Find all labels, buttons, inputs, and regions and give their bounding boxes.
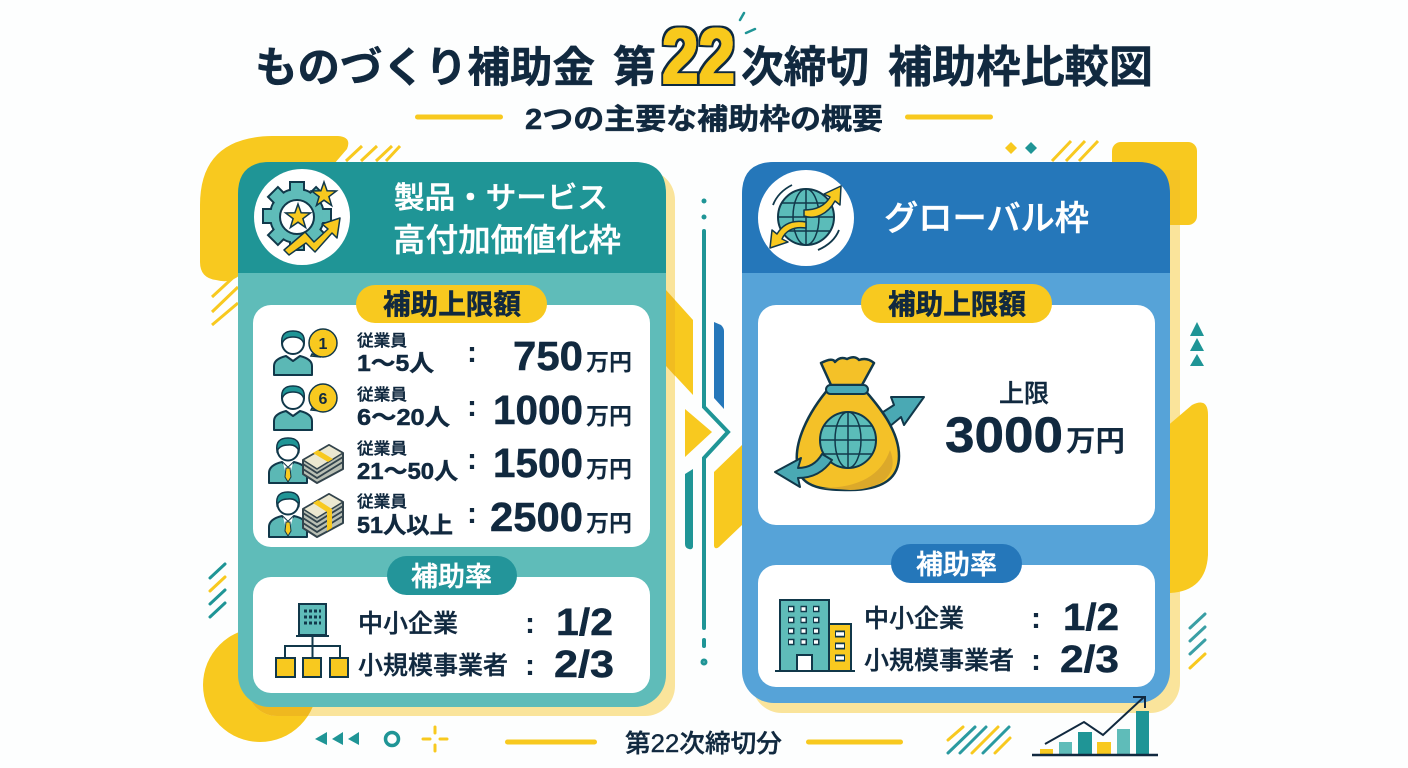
subsidy rate table: 2/3 [554,644,614,686]
row: 1-5 employees: 従業員 [357,332,407,350]
heading: グローバル枠 [884,200,1089,238]
row: 21-50 employees [269,438,632,486]
row: 1-5 employees: 1〜5人 [357,350,434,376]
subsidy rate table: 中小企業 [864,605,964,633]
subsidy rate table: 小規模事業者 [358,652,508,680]
subtitle: 2つの主要な補助枠の概要 [525,103,883,136]
row: 6-20 employees: 6〜20人 [357,404,450,430]
icon: money bag [775,357,924,490]
subsidy limit table: 補助上限額 [383,289,521,320]
subsidy rate table [253,556,650,693]
title: 第 [613,44,656,92]
title [255,12,1153,100]
subsidy rate table: : [525,649,535,682]
footer ornaments [315,727,1010,753]
subsidy limit table [253,285,650,547]
subsidy rate table: 補助率 [411,562,492,592]
row: 51 or more employees: : [467,497,477,530]
subsidy rate table: 1/2 [556,602,613,644]
title: ものづくり補助金 [255,44,595,91]
center divider [702,198,728,664]
subsidy rate table: : [525,607,535,640]
row: 6-20 employees: 万円 [586,403,632,429]
row: 1-5 employees: 万円 [586,349,632,375]
title: 次締切 [741,44,869,92]
limit amount: 万円 [1066,426,1125,458]
limit amount: 3000 [945,407,1063,463]
subsidy limit [758,284,1155,525]
title: 22 [662,12,735,100]
subsidy rate table: 中小企業 [358,610,458,638]
row: 51 or more employees: 2500 [490,494,583,540]
subsidy rate table: 1/2 [1063,597,1119,639]
row: 1-5 employees: 750 [513,333,583,379]
subsidy limit: 補助上限額 [888,289,1026,320]
row: 21-50 employees: 従業員 [357,440,407,458]
subsidy rate table [758,544,1155,687]
row: 21-50 employees: : [467,443,477,476]
row: 21-50 employees: 21〜50人 [357,458,458,484]
icon: globe arrows [758,170,854,266]
icon: building [775,600,855,671]
limit amount [945,380,1125,463]
row: 51 or more employees: 万円 [586,510,632,536]
subsidy rate table: : [1031,644,1041,677]
title: 補助枠比較図 [888,43,1153,92]
panel: global [742,162,1208,713]
decorative background shapes [200,13,1205,742]
row: 51 or more employees: 従業員 [357,493,407,511]
heading [393,182,621,258]
subsidy rate table: : [1031,602,1041,635]
heading: 高付加価値化枠 [393,222,621,258]
subsidy rate table: 2/3 [1060,639,1119,681]
subtitle [415,103,993,136]
row: 6-20 employees [274,384,632,433]
row: 1-5 employees: : [467,336,477,369]
icon: company structure [276,604,348,677]
row: 6-20 employees: 従業員 [357,386,407,404]
chart icon [1032,697,1158,755]
icon: gear star growth [254,169,350,265]
footer label: 第22次締切分 [625,730,782,758]
row: 6-20 employees: : [467,390,477,423]
row: 1-5 employees: 1 [319,336,328,353]
row: 51 or more employees [269,492,632,540]
heading: 製品・サービス [394,182,608,215]
row: 21-50 employees: 万円 [586,456,632,482]
row: 1-5 employees [274,329,632,379]
panel: product and service high value [238,162,675,716]
limit amount: 上限 [999,380,1049,408]
row: 6-20 employees: 1000 [493,387,583,433]
footer label [505,730,903,758]
subsidy rate table: 小規模事業者 [864,647,1014,675]
row: 6-20 employees: 6 [319,391,328,408]
subsidy rate table: 補助率 [916,550,997,580]
row: 51 or more employees: 51人以上 [357,512,453,538]
row: 21-50 employees: 1500 [493,440,583,486]
